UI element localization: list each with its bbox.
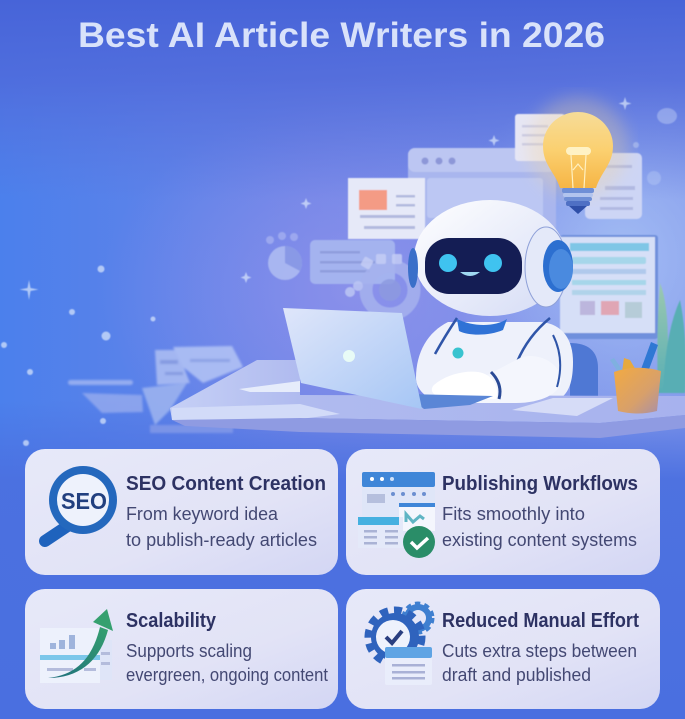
- chair: [570, 343, 598, 398]
- stacked documents left of desk: [68, 346, 243, 433]
- note card: [515, 114, 565, 161]
- description: [126, 504, 317, 550]
- robot torso: [416, 318, 573, 402]
- icon: publishing window with check: [358, 472, 435, 558]
- right text card: [585, 153, 642, 219]
- description: [442, 504, 637, 550]
- card: Scalability: [25, 589, 338, 709]
- left ear: [408, 248, 418, 288]
- light bulb: [528, 97, 628, 214]
- description: From keyword idea: [126, 504, 279, 524]
- document with orange block: [348, 178, 425, 239]
- icon: magnifying glass: SEO: [61, 488, 107, 514]
- right arm: [462, 356, 561, 403]
- card: Publishing Workflows: [346, 449, 660, 575]
- description: evergreen, ongoing content: [126, 665, 328, 685]
- robot arm and hand: [432, 335, 561, 403]
- browser window panel: [408, 148, 556, 238]
- icon: magnifying glass: [45, 466, 117, 541]
- background interface panels: [266, 114, 685, 393]
- description: [126, 641, 328, 685]
- description: Supports scaling: [126, 641, 252, 661]
- chest light: [452, 348, 464, 358]
- heading: Publishing Workflows: [442, 473, 638, 495]
- left chart panel: [310, 240, 395, 284]
- heading: Reduced Manual Effort: [442, 610, 639, 632]
- hand: [432, 372, 497, 399]
- card: Reduced Manual Effort: [346, 589, 660, 709]
- description: draft and published: [442, 665, 591, 685]
- neck collar: [457, 319, 507, 335]
- desk: [170, 360, 685, 438]
- heading: Scalability: [126, 610, 217, 632]
- laptop: [283, 308, 493, 409]
- head: [414, 200, 566, 316]
- icon: gears with check and document: [368, 604, 432, 685]
- description: Cuts extra steps between: [442, 641, 637, 661]
- heading: SEO Content Creation: [126, 473, 326, 495]
- eyes: [439, 254, 457, 272]
- description: Fits smoothly into: [442, 504, 585, 524]
- gear: [345, 254, 414, 314]
- visor: [425, 238, 522, 294]
- pencil cup: [610, 342, 661, 414]
- plant: [657, 283, 685, 393]
- monitor: [560, 235, 658, 339]
- title: Best AI Article Writers in 2026: [78, 16, 605, 55]
- paper on desk: [512, 398, 613, 416]
- description: [442, 641, 637, 685]
- description: existing content systems: [442, 530, 637, 550]
- icon: growth chart with arrow: [40, 609, 113, 683]
- smile: [460, 272, 480, 276]
- robot body: [416, 322, 573, 402]
- sparkles: [1, 97, 677, 446]
- card: SEO Content Creation: [25, 449, 338, 575]
- description: to publish-ready articles: [126, 530, 317, 550]
- headphone: [525, 227, 573, 307]
- pie chart: [266, 232, 302, 280]
- robot head: [408, 200, 573, 316]
